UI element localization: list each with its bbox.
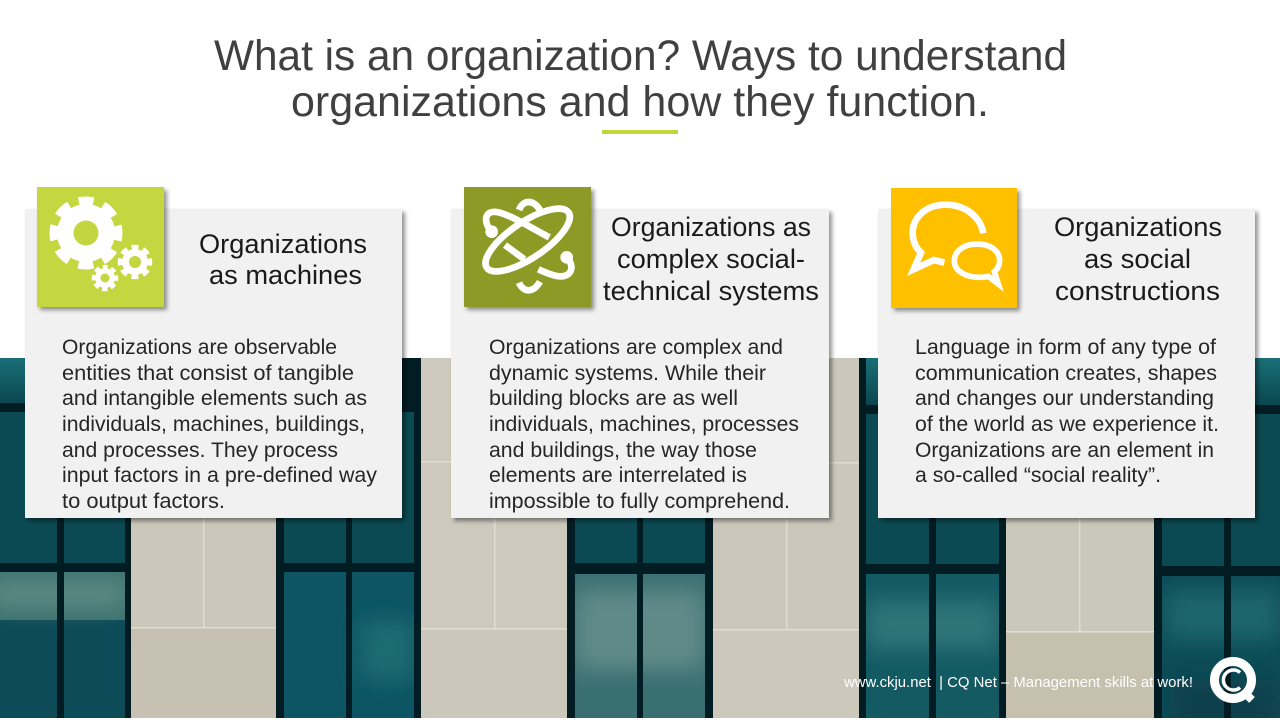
title: organizations and how they function. (291, 78, 989, 126)
body text: machines: and processes. They process (62, 439, 338, 462)
heading: machines: as machines (209, 260, 362, 290)
body text: social constructions: and changes our understanding (915, 387, 1214, 410)
body text: complex systems: dynamic systems. While their (489, 362, 766, 385)
body text: social constructions: communication creates, shapes (915, 362, 1217, 385)
heading: machines (199, 229, 367, 290)
body text: social constructions: of the world as we experience it. (915, 413, 1219, 436)
footer text: www.ckju.net | CQ Net – Management skills at work! (843, 674, 1193, 691)
body text: social constructions: Language in form of any type of (915, 336, 1216, 359)
title: What is an organization? Ways to understand (214, 32, 1067, 80)
heading: machines: Organizations (199, 229, 367, 259)
body text: machines: Organizations are observable (62, 336, 337, 359)
body text: complex systems: impossible to fully comprehend. (489, 490, 790, 513)
heading: complex social-technical systems: technical systems (603, 276, 819, 306)
body text: complex systems (489, 336, 799, 513)
body text: complex systems: building blocks are as well (489, 387, 738, 410)
body text: complex systems: individuals, machines, processes (489, 413, 799, 436)
heading: social constructions: Organizations (1054, 212, 1222, 242)
body text: social constructions: a so-called “social reality”. (915, 464, 1161, 487)
body text: complex systems: Organizations are complex and (489, 336, 783, 359)
body text: machines (62, 336, 378, 513)
heading: complex social-technical systems: Organizations as (611, 212, 811, 242)
title underline accent (602, 130, 678, 134)
logo: CQ (1214, 662, 1252, 700)
heading: complex social-technical systems (603, 212, 819, 306)
heading: social constructions: constructions (1055, 276, 1220, 306)
panel: organizations as complex social-technical systems (451, 187, 829, 518)
icon: atom (464, 187, 591, 307)
body text: social constructions (915, 336, 1219, 487)
body text: machines: entities that consist of tangible (62, 362, 354, 385)
background photo: teal windows and stone wall (0, 358, 1280, 720)
body text: complex systems: elements are interrelated is (489, 464, 747, 487)
body text: machines: to output factors. (62, 490, 225, 513)
body text: machines: input factors in a pre-defined way (62, 464, 378, 487)
icon: speech bubbles (891, 188, 1017, 308)
title (214, 32, 1067, 126)
body text: machines: and intangible elements such as (62, 387, 367, 410)
heading: social constructions: as social (1084, 244, 1191, 274)
body text: social constructions: Organizations are an element in (915, 439, 1214, 462)
heading: social constructions (1054, 212, 1222, 306)
body text: complex systems: and buildings, the way those (489, 439, 757, 462)
panel: organizations as machines (25, 187, 402, 518)
panel: organizations as social constructions (878, 188, 1255, 518)
heading: complex social-technical systems: complex social- (617, 244, 805, 274)
body text: machines: individuals, machines, buildings, (62, 413, 365, 436)
icon: gears (37, 187, 164, 307)
